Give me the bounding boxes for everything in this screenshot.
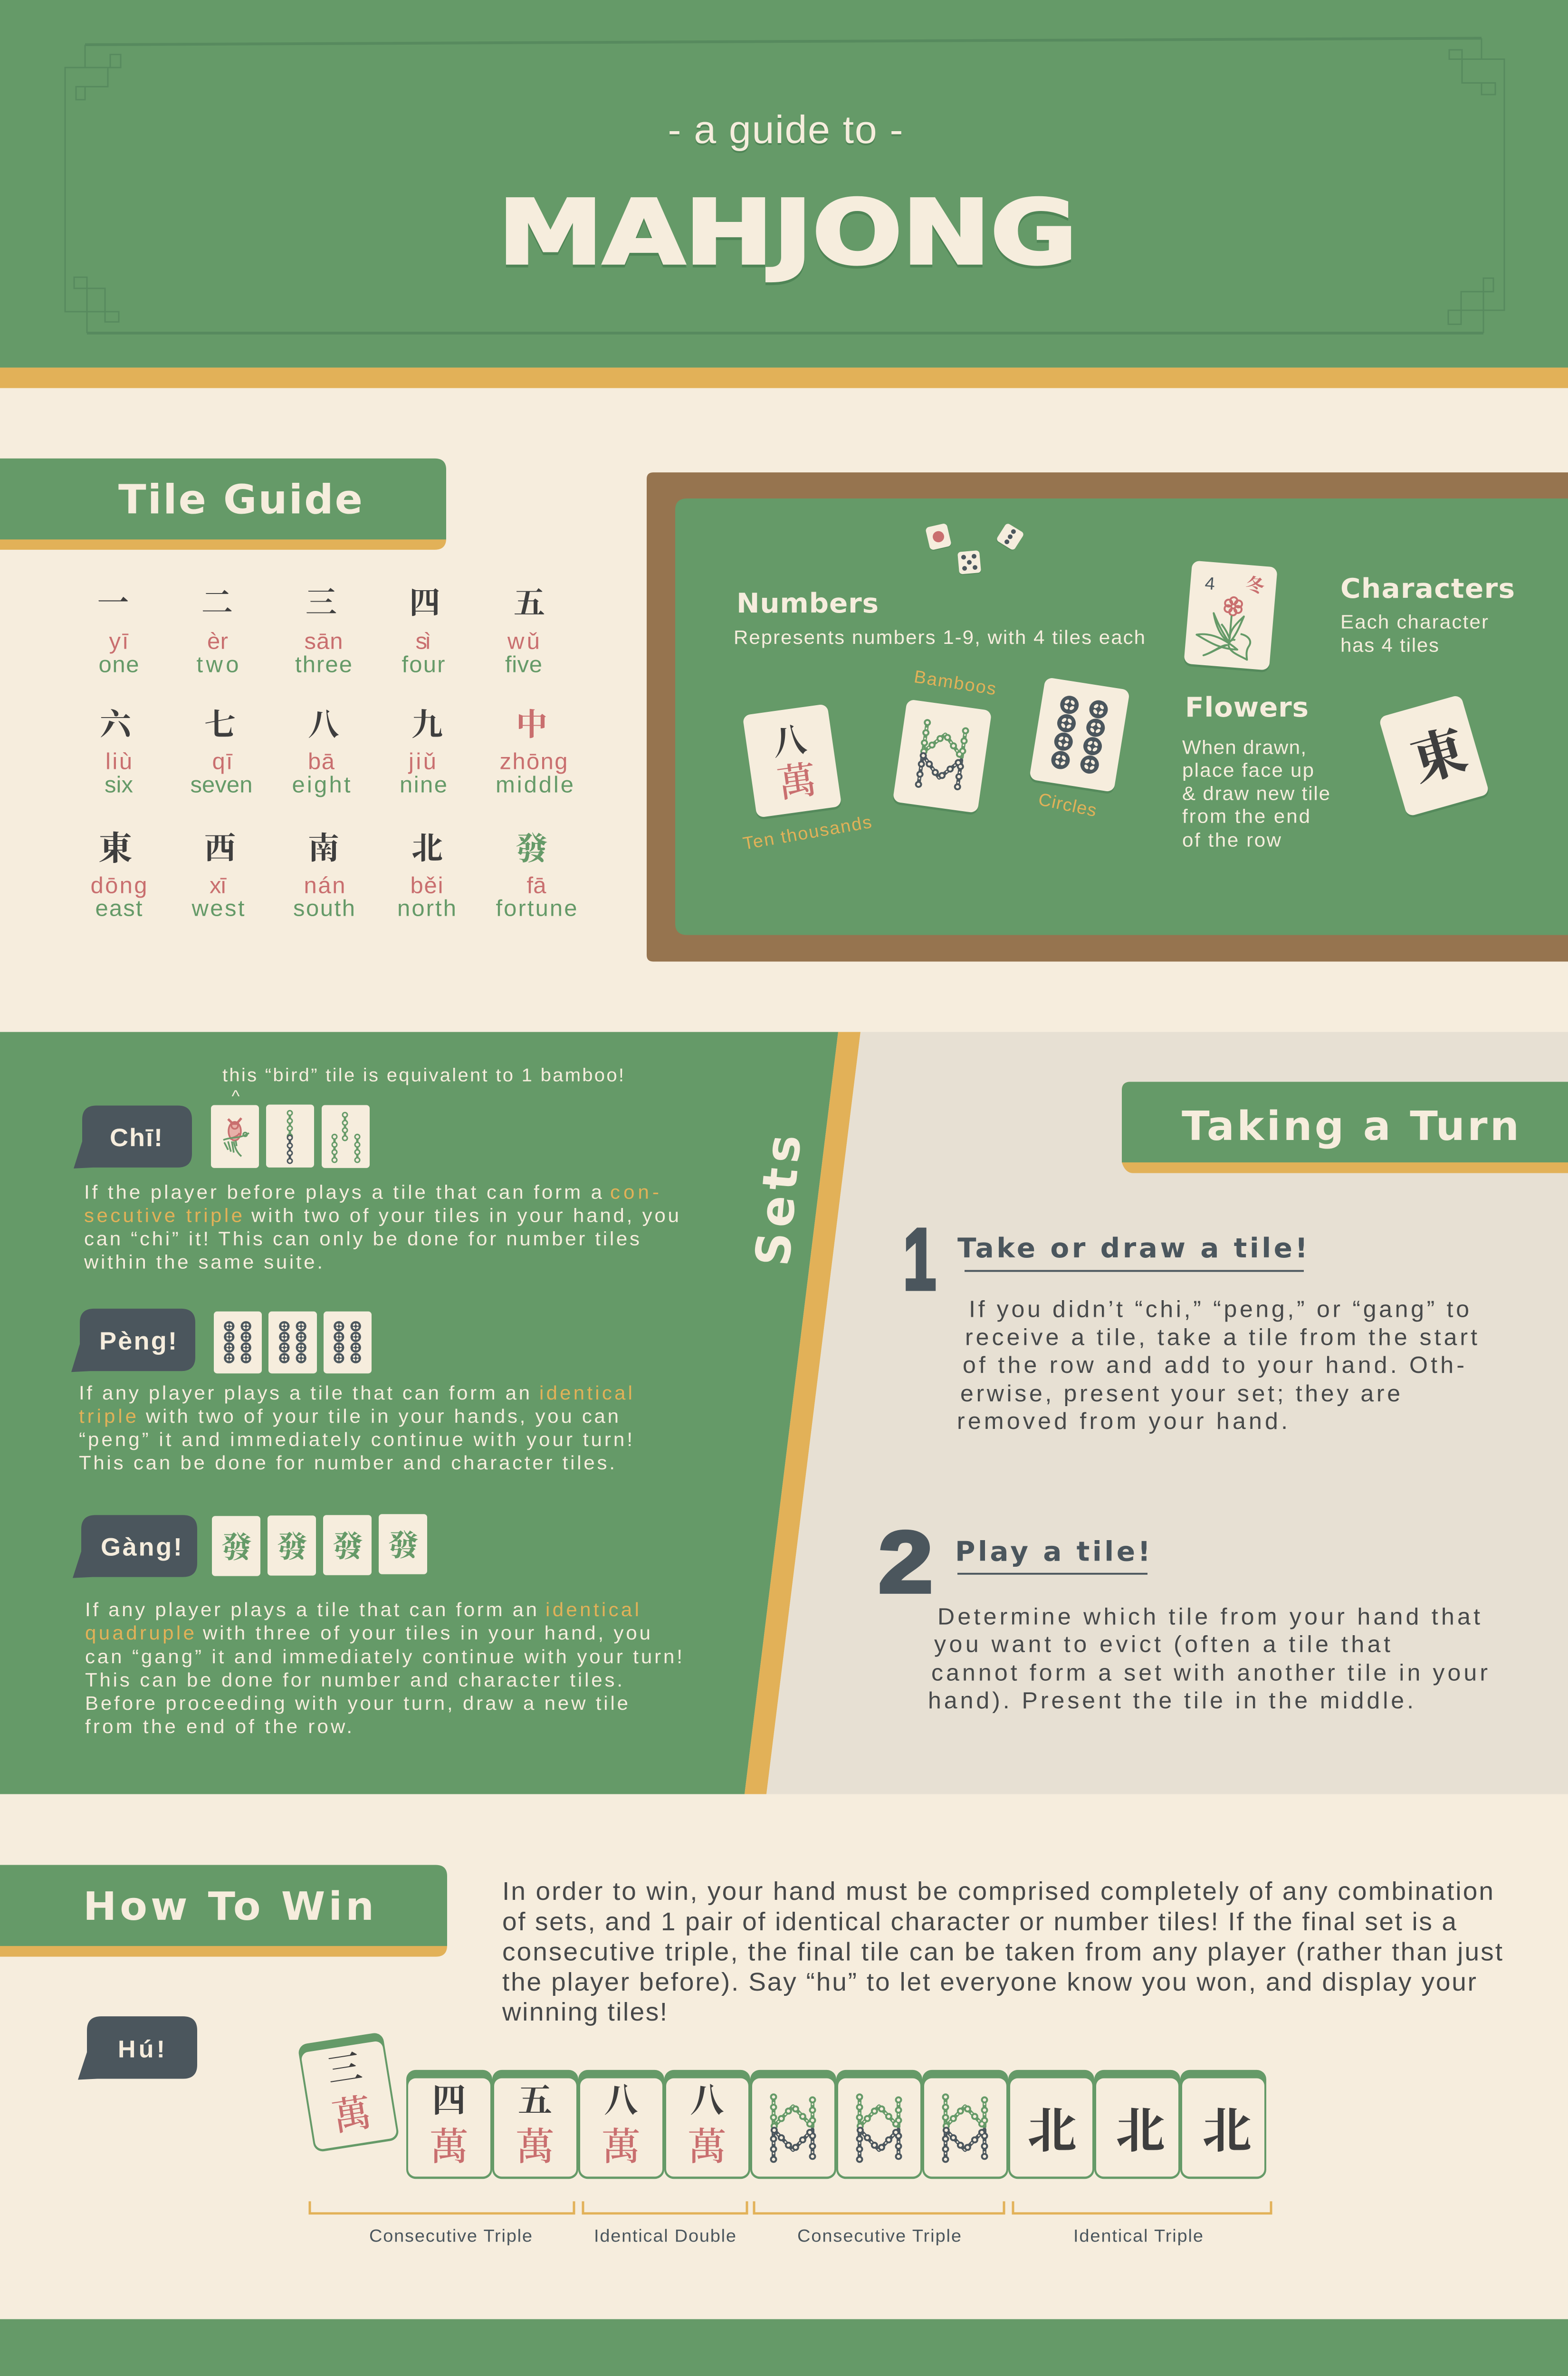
character grid: six (105, 772, 133, 798)
text: how to win description: In order to win, your hand must be comprised completely of any combination (502, 1877, 1493, 1906)
text: step 2 description (928, 1604, 1488, 1714)
tile: drawn winning tile: 三 (325, 2048, 364, 2090)
text: how to win description: of sets, and 1 pair of identical character or number tiles! If the final set is a (502, 1907, 1457, 1936)
text: gang description (85, 1598, 682, 1737)
character grid: four (402, 652, 445, 678)
speech bubble: peng: Pèng! (99, 1328, 177, 1355)
character grid: yī (109, 629, 129, 654)
text: chi description: secutive triple (84, 1204, 242, 1226)
note: bird tile: this “bird” tile is equivalent to 1 bamboo! (222, 1065, 624, 1085)
text: gang description: from the end of the row. (85, 1715, 352, 1737)
character grid: 東 (98, 830, 133, 867)
text: gang description: Before proceeding with your turn, draw a new tile (85, 1692, 628, 1714)
panel: sets (0, 1032, 1568, 1794)
note: bird tile (222, 1065, 624, 1106)
tile: bamboos (892, 699, 992, 815)
tiles: gang set: 發 (277, 1531, 307, 1564)
text: chi description: with two of your tiles in your hand, you (251, 1204, 679, 1226)
winning tile row: 五 (518, 2082, 552, 2119)
text: step 1 description: receive a tile, take a tile from the start (965, 1324, 1477, 1350)
character grid: 九 (411, 709, 443, 742)
character grid: nán (304, 873, 345, 898)
tiles: gang set: 發 (333, 1530, 363, 1563)
character grid: five (505, 652, 542, 678)
character grid: 北 (411, 832, 443, 866)
character grid: běi (411, 873, 443, 898)
brackets with set labels: Identical Double (594, 2226, 736, 2246)
tiles: gang set: 發 (388, 1529, 419, 1562)
text: step 2 description: cannot form a set with another tile in your (931, 1660, 1488, 1686)
text: flowers description (1182, 736, 1330, 851)
brackets with set labels: Consecutive Triple (369, 2226, 532, 2246)
character grid: west (191, 896, 245, 921)
note: bird tile: ^ (232, 1087, 240, 1106)
step 1 heading: Take or draw a tile! (957, 1233, 1308, 1264)
winning tile row: 北 (1202, 2105, 1252, 2158)
heading: taking a turn: Taking a Turn (1182, 1103, 1519, 1150)
character grid (90, 586, 577, 921)
text: numbers description: Represents numbers 1-9, with 4 tiles each (734, 626, 1145, 648)
text: characters description: Each character (1340, 611, 1488, 632)
panel: tile guide (0, 459, 577, 921)
decorative frame (65, 38, 1504, 333)
tiles: gang set: 發 (221, 1531, 252, 1564)
character grid: one (99, 652, 139, 678)
tile: flower: 冬 (1245, 575, 1266, 597)
panel: taking a turn (879, 1082, 1568, 1714)
text: how to win description: the player before). Say “hu” to let everyone know you won, and display your (502, 1968, 1476, 1996)
speech bubble: hu (78, 2016, 197, 2079)
character grid: 發 (516, 831, 548, 866)
speech bubble: peng (71, 1309, 195, 1372)
character grid: 中 (516, 709, 547, 742)
text: peng description: “peng” it and immediately continue with your turn! (79, 1428, 632, 1450)
winning tile row (406, 2070, 1266, 2179)
text: flowers description: When drawn, (1182, 736, 1306, 758)
tiles: chi set (211, 1105, 370, 1168)
text: peng description (79, 1381, 632, 1474)
text: gang description: quadruple (85, 1621, 194, 1644)
text: peng description: identical (539, 1381, 632, 1404)
character grid: 六 (100, 709, 134, 742)
character grid: 五 (514, 586, 545, 620)
text: characters description (1340, 611, 1488, 656)
heading: numbers: Numbers (736, 588, 879, 619)
character grid: 一 (97, 586, 129, 620)
character grid: 八 (308, 709, 339, 742)
character grid: east (96, 896, 143, 921)
text: gang description: This can be done for number and character tiles. (85, 1668, 622, 1691)
text: peng description: with two of your tile in your hands, you can (145, 1405, 619, 1427)
brackets with set labels: Consecutive Triple (797, 2226, 961, 2246)
character grid: jiǔ (408, 749, 436, 775)
brackets with set labels: Identical Triple (1073, 2226, 1203, 2246)
tile: ten thousands (742, 704, 842, 820)
tile: flower (1184, 560, 1278, 673)
heading: how to win (0, 1865, 447, 1957)
character grid: north (397, 896, 456, 921)
text: chi description: con- (610, 1181, 659, 1203)
winning tile row: 北 (1116, 2105, 1165, 2158)
character grid: qī (212, 749, 233, 775)
label: ten thousands: Ten thousands (741, 812, 873, 853)
winning tile row: 八 (690, 2082, 724, 2119)
text: flowers description: place face up (1182, 759, 1314, 781)
subtitle: - a guide to - (668, 108, 903, 152)
icon: dice (925, 523, 1024, 575)
heading: flowers: Flowers (1185, 691, 1309, 723)
text: flowers description: of the row (1182, 829, 1281, 851)
tile: east wind (1378, 694, 1490, 819)
text: gang description: identical (545, 1598, 639, 1620)
character grid: èr (207, 629, 228, 654)
character grid: 七 (204, 709, 236, 742)
text: gang description: If any player plays a tile that can form an (85, 1598, 537, 1620)
tile: drawn winning tile (297, 2032, 400, 2153)
text: gang description: with three of your tiles in your hand, you (202, 1621, 650, 1644)
label: bamboos: Bamboos (913, 666, 997, 699)
character grid: 三 (306, 586, 337, 620)
character grid: two (197, 652, 239, 678)
text: gang description: can “gang” it and immediately continue with your turn! (85, 1645, 682, 1667)
character grid: 西 (204, 832, 236, 866)
text: step 1 description: If you didn’t “chi,” “peng,” or “gang” to (969, 1296, 1469, 1322)
text: step 2 description: you want to evict (often a tile that (934, 1631, 1390, 1657)
character grid: xī (210, 873, 227, 898)
character grid: sān (304, 629, 343, 654)
character grid: seven (191, 772, 253, 798)
text: how to win description: consecutive triple, the final tile can be taken from any player (rather than just (502, 1937, 1502, 1966)
winning tile row: 萬 (602, 2126, 641, 2168)
character grid: 二 (201, 586, 233, 620)
heading: taking a turn (1122, 1082, 1568, 1173)
winning tile row: 萬 (430, 2126, 468, 2168)
text: flowers description: & draw new tile (1182, 782, 1330, 804)
text: chi description: can “chi” it! This can only be done for number tiles (84, 1227, 640, 1249)
character grid: middle (496, 772, 574, 798)
heading: tile guide (0, 459, 446, 550)
character grid: south (293, 896, 355, 921)
winning tile row: 四 (432, 2082, 466, 2119)
tiles: peng set (214, 1312, 372, 1373)
text: step 1 description: erwise, present your set; they are (960, 1380, 1400, 1407)
character grid: fā (527, 873, 546, 898)
tile: flower: 4 (1204, 573, 1216, 594)
tile: ten thousands: 八 (770, 721, 809, 763)
text: step 1 description: removed from your hand. (957, 1408, 1288, 1434)
heading: how to win: How To Win (83, 1884, 374, 1929)
character grid: liù (105, 749, 132, 775)
label: circles: Circles (1037, 789, 1099, 820)
character grid: 四 (409, 586, 440, 620)
text: peng description: If any player plays a tile that can form an (79, 1381, 530, 1404)
text: flowers description: from the end (1182, 805, 1310, 827)
winning tile row: 萬 (688, 2126, 727, 2168)
text: how to win description: winning tiles! (502, 1997, 667, 2026)
text: chi description: If the player before plays a tile that can form a (84, 1181, 602, 1203)
speech bubble: chi (74, 1105, 192, 1169)
header banner (0, 0, 1568, 388)
character grid: eight (292, 772, 351, 798)
character grid: bā (308, 749, 335, 775)
heading: tile guide: Tile Guide (118, 477, 363, 523)
character grid: 南 (308, 832, 339, 866)
speech bubble: hu: Hú! (118, 2035, 165, 2062)
panel: game board (647, 472, 1568, 962)
text: peng description: This can be done for number and character tiles. (79, 1452, 615, 1474)
character grid: zhōng (499, 749, 567, 775)
text: chi description (84, 1181, 679, 1273)
heading: sets: Sets (745, 1132, 812, 1268)
brackets with set labels (310, 2201, 1271, 2246)
tile: east wind: 東 (1405, 720, 1474, 793)
tiles: gang set (212, 1514, 427, 1576)
character grid: three (295, 652, 352, 678)
text: step 1 description (957, 1296, 1477, 1434)
winning tile row: 萬 (516, 2126, 555, 2168)
tile: drawn winning tile: 萬 (329, 2091, 374, 2139)
text: how to win description (502, 1877, 1502, 2026)
step 1 number: 1 (903, 1211, 936, 1308)
character grid: dōng (90, 873, 147, 898)
text: step 2 description: Determine which tile from your hand that (937, 1604, 1480, 1630)
step 2 number: 2 (879, 1514, 933, 1611)
text: chi description: within the same suite. (84, 1251, 323, 1273)
tile: circles (1029, 677, 1130, 795)
text: peng description: triple (79, 1405, 136, 1427)
step 2 heading: Play a tile! (955, 1536, 1150, 1567)
winning tile row: 北 (1027, 2105, 1077, 2158)
speech bubble: gang (73, 1515, 197, 1578)
character grid: wǔ (507, 629, 540, 654)
character grid: fortune (496, 896, 577, 921)
panel: how to win (0, 1865, 1502, 2246)
text: step 1 description: of the row and add to your hand. Oth- (963, 1352, 1464, 1378)
winning tile row: 八 (604, 2082, 638, 2119)
title: MAHJONG (498, 182, 1077, 284)
text: characters description: has 4 tiles (1340, 634, 1439, 656)
speech bubble: chi: Chī! (110, 1124, 163, 1152)
footer bar (0, 2319, 1568, 2376)
character grid: sì (415, 629, 431, 654)
heading: characters: Characters (1340, 573, 1515, 604)
character grid: nine (400, 772, 447, 798)
text: step 2 description: hand). Present the tile in the middle. (928, 1688, 1414, 1714)
speech bubble: gang: Gàng! (101, 1533, 182, 1561)
tile: ten thousands: 萬 (775, 758, 819, 806)
